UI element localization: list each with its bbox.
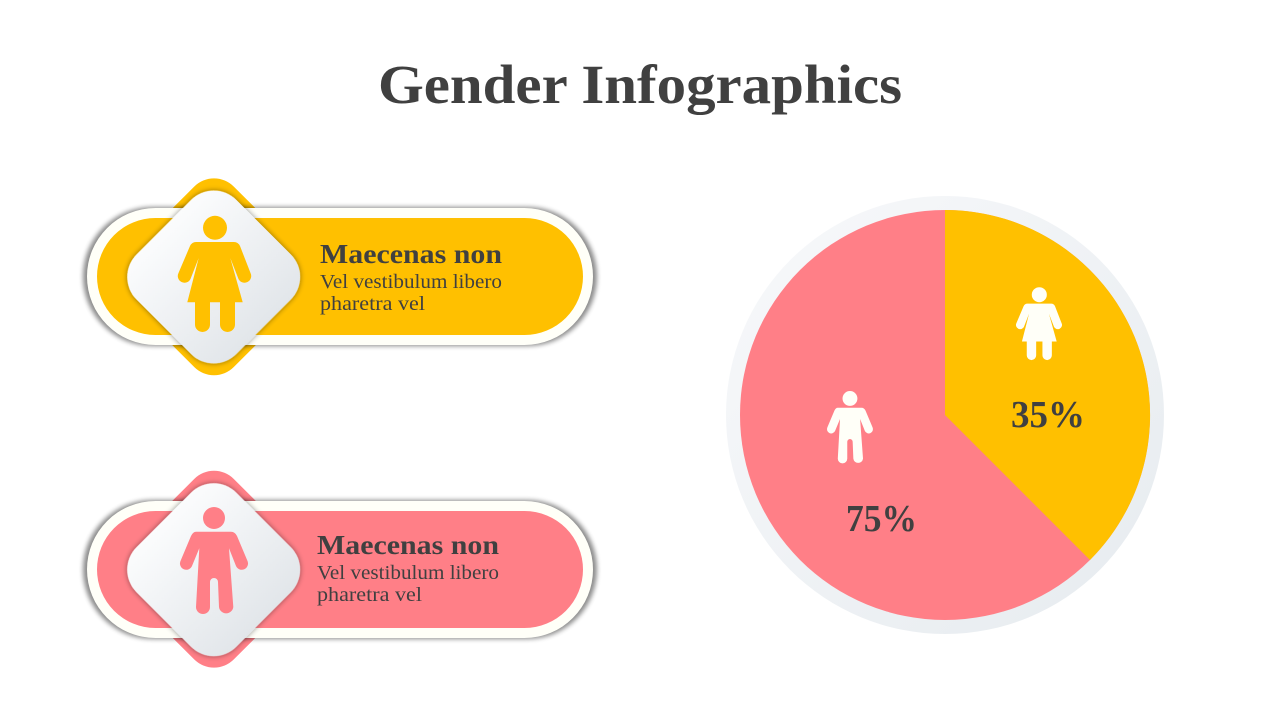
pill outer ring [87,501,593,638]
icon: male [180,507,248,614]
back diamond: yellow [104,167,324,387]
text block: pharetra vel [320,293,425,315]
panel: female callout [83,167,597,387]
text block: Vel vestibulum libero [320,271,502,293]
text block: Maecenas non [320,239,502,269]
text block: pharetra vel [317,584,422,606]
front diamond [114,177,313,377]
title: Gender Infographics [378,54,902,115]
pie outer ring [726,196,1164,634]
icon: female [178,216,251,332]
text block [317,530,499,606]
back diamond: pink [104,459,324,679]
pill outer ring [87,208,593,345]
text block: Maecenas non [317,530,499,560]
pill inner: yellow [97,218,583,335]
panel: male callout [83,459,597,679]
pie slice: male [740,210,1150,620]
value: 35%: 35% [1011,394,1085,436]
pie slice: female [945,210,1150,560]
icon: female white [1016,287,1062,360]
front diamond [114,470,313,669]
pill inner: pink [97,511,583,628]
text block: Vel vestibulum libero [317,562,499,584]
icon: male white [827,391,873,463]
text block [320,239,502,315]
pie chart [726,196,1164,634]
value: 75%: 75% [846,498,917,540]
